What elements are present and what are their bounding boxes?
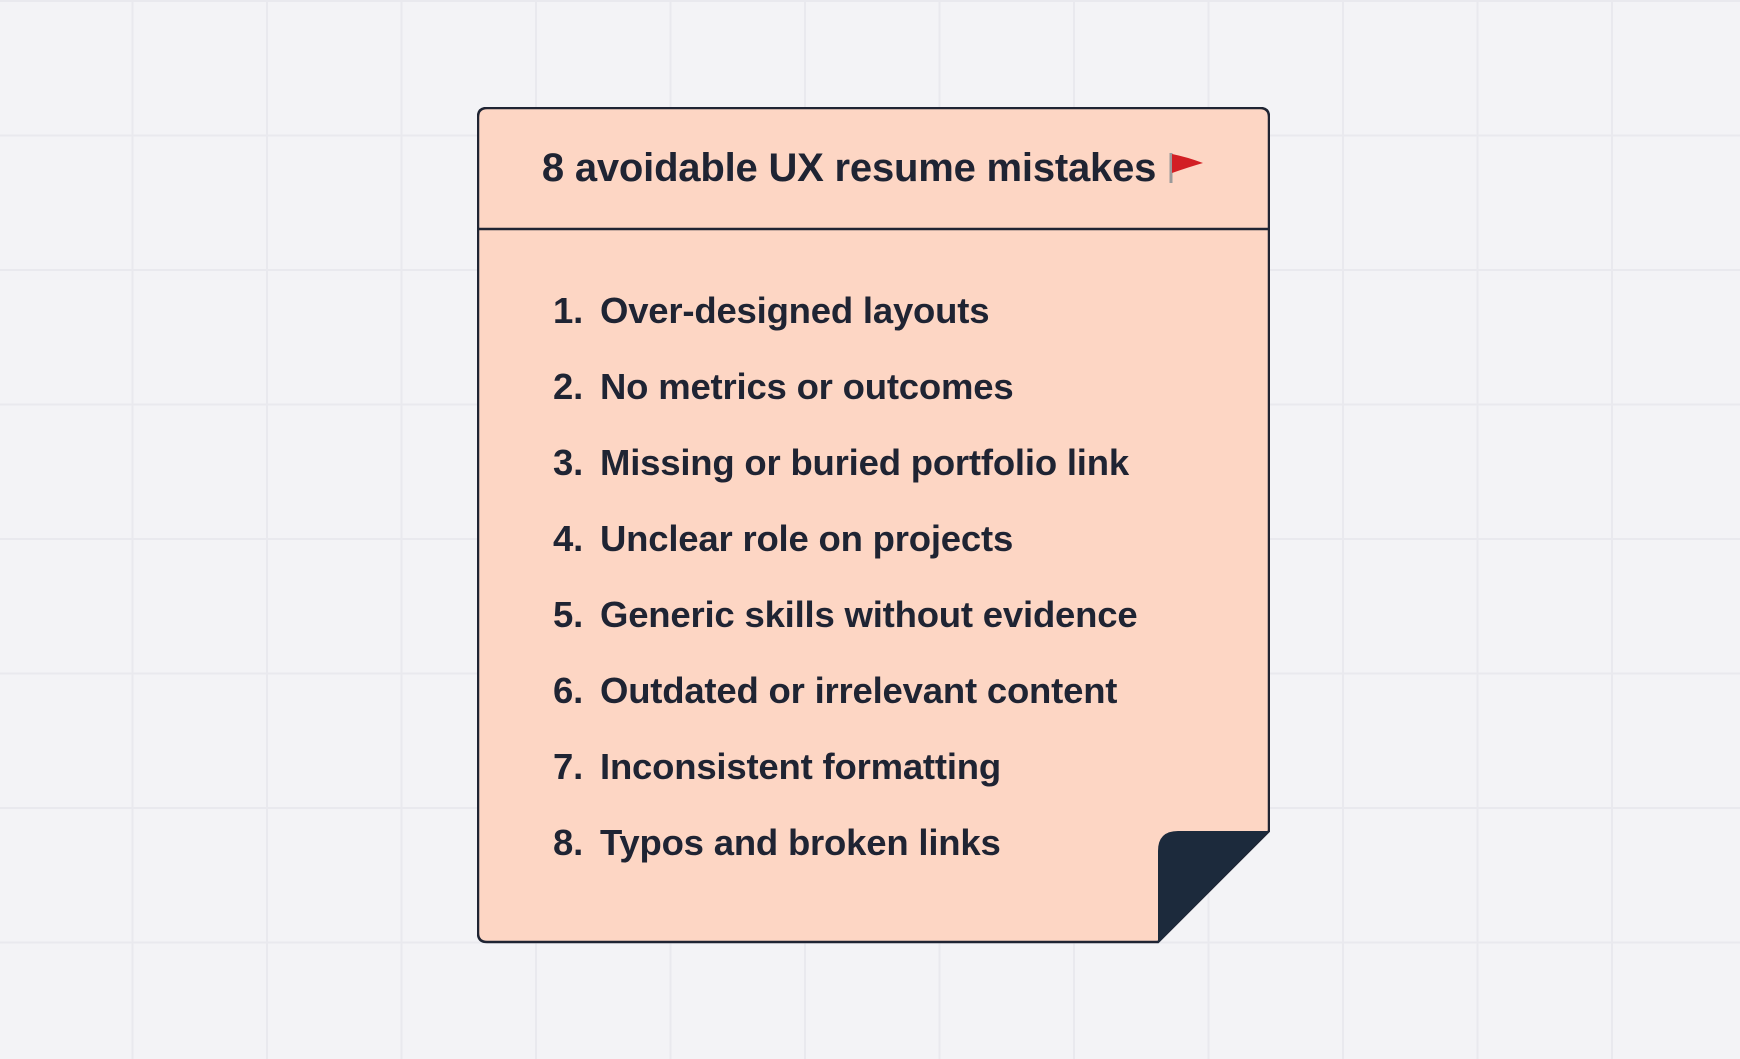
title: 8 avoidable UX resume mistakes [542,146,1156,190]
list item 2: No metrics or outcomes [600,366,1013,407]
list item 6: 6. [553,670,583,711]
icon: folded corner [1158,831,1268,942]
list item 8: 8. [553,822,583,863]
list item 7: 7. [553,746,583,787]
list item 1: Over-designed layouts [600,290,989,331]
list item 5: 5. [553,594,583,635]
list item 8: Typos and broken links [600,822,1001,863]
list item 3: Missing or buried portfolio link [600,442,1129,483]
list item 4: 4. [553,518,583,559]
list item 1: 1. [553,290,583,331]
list item 3: 3. [553,442,583,483]
list item 5: Generic skills without evidence [600,594,1137,635]
list item 7: Inconsistent formatting [600,746,1001,787]
list item 2: 2. [553,366,583,407]
list item 4: Unclear role on projects [600,518,1013,559]
list item 6: Outdated or irrelevant content [600,670,1117,711]
panel: sticky note card [477,107,1270,944]
